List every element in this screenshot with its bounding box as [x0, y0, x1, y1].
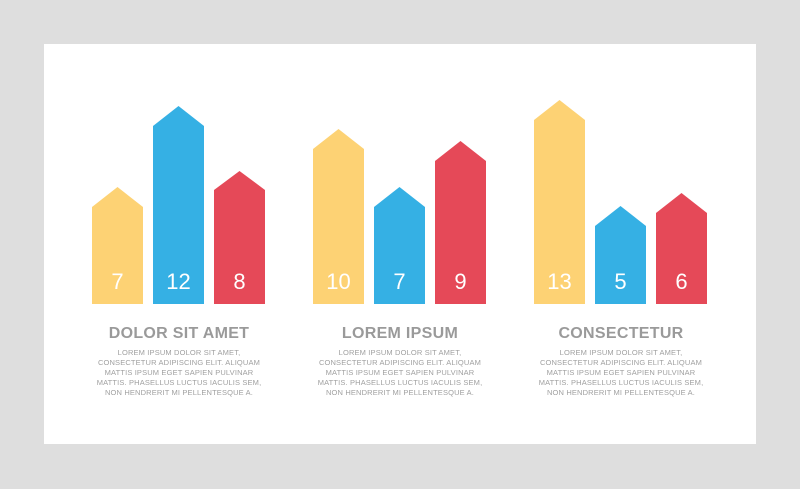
bar: red 6: 6	[675, 269, 688, 294]
chart: group 3	[534, 100, 707, 304]
bar: yellow 10: 10	[326, 269, 351, 294]
bar: blue 7: 7	[393, 269, 406, 294]
bar: yellow 7: 7	[111, 269, 124, 294]
body text: MATTIS. PHASELLUS LUCTUS IACULIS SEM,	[97, 378, 261, 387]
bar: red 9: 9	[454, 269, 467, 294]
panel: white card	[44, 44, 756, 444]
body text: NON HENDRERIT MI PELLENTESQUE A.	[105, 388, 253, 397]
bar: blue 12	[153, 106, 204, 304]
body text: MATTIS. PHASELLUS LUCTUS IACULIS SEM,	[539, 378, 703, 387]
bar: blue 7	[374, 187, 425, 304]
bar: yellow 13	[534, 100, 585, 304]
body text: LOREM IPSUM DOLOR SIT AMET,	[118, 348, 240, 357]
chart: group 1	[92, 106, 265, 304]
bar: blue 5	[595, 206, 646, 304]
body text	[97, 348, 261, 397]
bar: red 8: 8	[233, 269, 246, 294]
heading: CONSECTETUR	[558, 325, 684, 342]
bar: red 9	[435, 141, 486, 304]
body text: NON HENDRERIT MI PELLENTESQUE A.	[326, 388, 474, 397]
bar: yellow 10	[313, 129, 364, 304]
text block: CONSECTETUR	[539, 325, 703, 397]
bar: yellow 7	[92, 187, 143, 304]
bar: blue 5: 5	[614, 269, 627, 294]
body text: MATTIS IPSUM EGET SAPIEN PULVINAR	[326, 368, 475, 377]
body text: NON HENDRERIT MI PELLENTESQUE A.	[547, 388, 695, 397]
body text: LOREM IPSUM DOLOR SIT AMET,	[339, 348, 461, 357]
bar: red 6	[656, 193, 707, 304]
bar: yellow 13: 13	[547, 269, 572, 294]
heading: LOREM IPSUM	[342, 325, 458, 342]
body text: LOREM IPSUM DOLOR SIT AMET,	[560, 348, 682, 357]
chart: group 2	[313, 129, 486, 304]
text block: LOREM IPSUM	[318, 325, 482, 397]
heading: DOLOR SIT AMET	[109, 325, 249, 342]
body text	[318, 348, 482, 397]
body text: MATTIS IPSUM EGET SAPIEN PULVINAR	[547, 368, 696, 377]
body text: MATTIS. PHASELLUS LUCTUS IACULIS SEM,	[318, 378, 482, 387]
body text	[539, 348, 703, 397]
body text: CONSECTETUR ADIPISCING ELIT. ALIQUAM	[319, 358, 481, 367]
body text: CONSECTETUR ADIPISCING ELIT. ALIQUAM	[540, 358, 702, 367]
text block: DOLOR SIT AMET	[97, 325, 261, 397]
body text: CONSECTETUR ADIPISCING ELIT. ALIQUAM	[98, 358, 260, 367]
bar: blue 12: 12	[166, 269, 191, 294]
bar: red 8	[214, 171, 265, 304]
body text: MATTIS IPSUM EGET SAPIEN PULVINAR	[105, 368, 254, 377]
